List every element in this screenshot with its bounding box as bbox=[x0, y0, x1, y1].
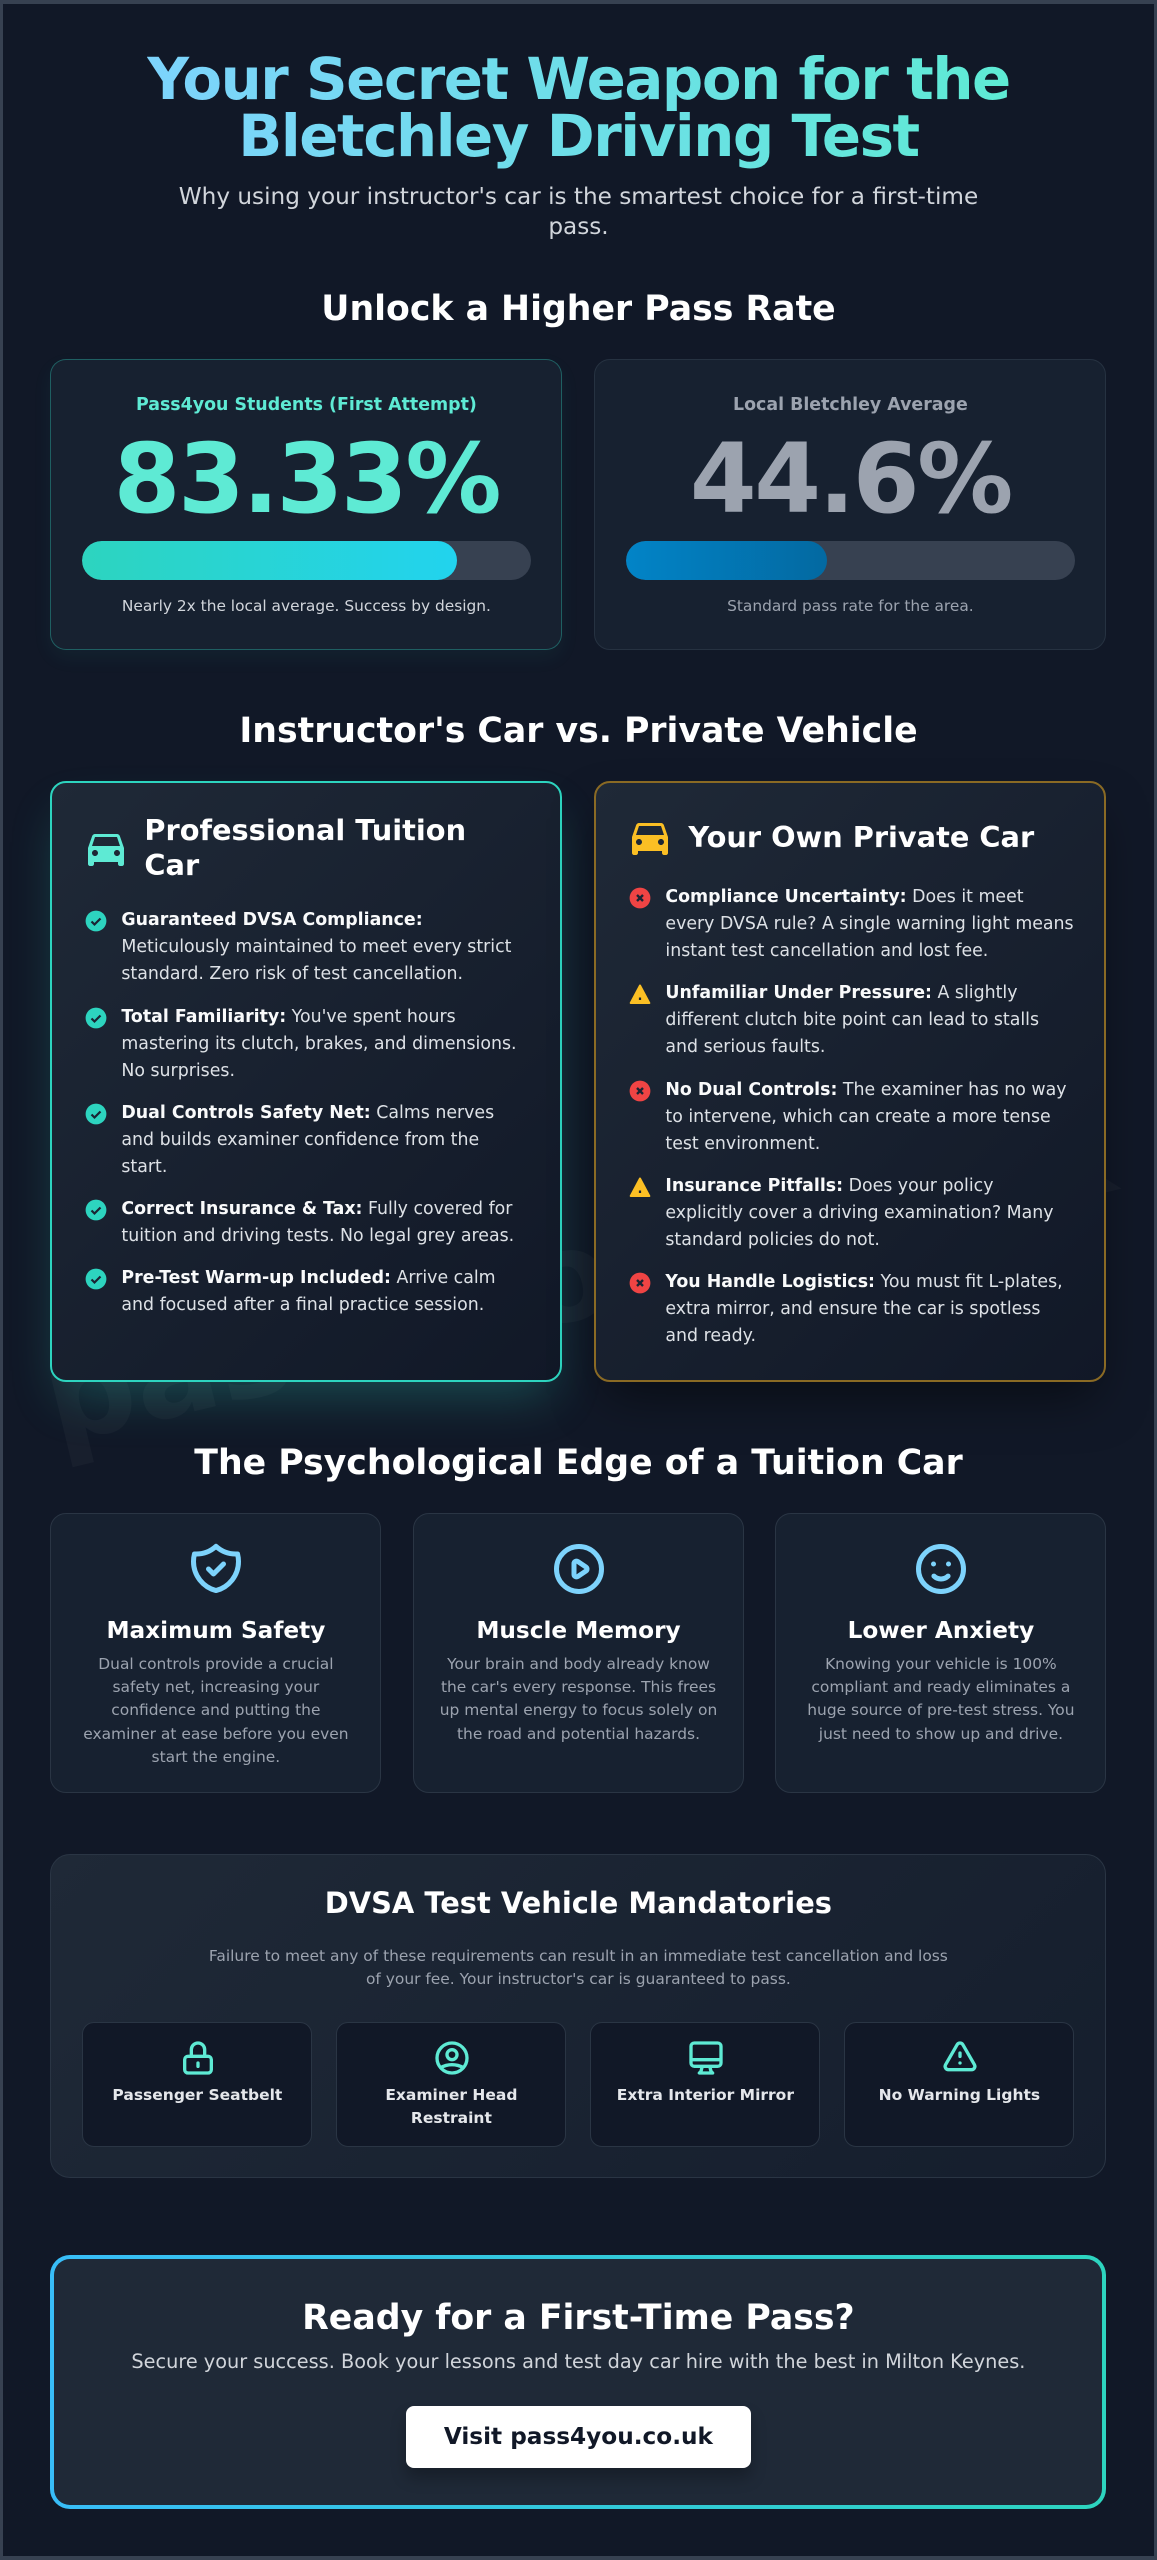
card text: examiner at ease before you even bbox=[83, 1725, 349, 1743]
item: insurance: explicitly cover a driving examination? Many bbox=[665, 1203, 1054, 1223]
card text: just need to show up and drive. bbox=[819, 1725, 1063, 1743]
icon: play bbox=[554, 1544, 604, 1594]
panel: lower anxiety bbox=[775, 1513, 1106, 1793]
panel heading: DVSA Test Vehicle Mandatories bbox=[325, 1886, 832, 1920]
card text bbox=[83, 1655, 349, 1766]
panel: muscle memory bbox=[413, 1513, 744, 1793]
item: compliance: standard. Zero risk of test cancellation. bbox=[121, 964, 463, 984]
item: warm-up: and focused after a final practice session. bbox=[121, 1295, 484, 1315]
panel: dvsa mandatories bbox=[50, 1854, 1106, 2178]
card heading: Muscle Memory bbox=[476, 1617, 681, 1644]
item: warm-up: Pre-Test Warm-up Included: Arrive calm bbox=[121, 1268, 496, 1288]
item: dual controls: Dual Controls Safety Net: Calms nerves bbox=[121, 1103, 494, 1123]
label: Extra Interior Mirror bbox=[617, 2086, 794, 2104]
item: logistics: extra mirror, and ensure the car is spotless bbox=[665, 1299, 1040, 1319]
panel heading: Car bbox=[144, 848, 199, 882]
item: insurance bbox=[630, 1176, 1054, 1250]
panel text bbox=[209, 1947, 948, 1988]
item: dual controls: test environment. bbox=[665, 1134, 820, 1154]
icon: warning bbox=[943, 2041, 977, 2072]
card text: safety net, increasing your bbox=[113, 1678, 319, 1696]
label bbox=[385, 2086, 517, 2127]
card text: Your brain and body already know bbox=[447, 1655, 710, 1673]
label: Restraint bbox=[411, 2109, 492, 2127]
item: logistics: and ready. bbox=[665, 1326, 756, 1346]
panel heading: Professional Tuition bbox=[144, 813, 466, 847]
item: logistics bbox=[630, 1272, 1063, 1346]
stat value: 44.6% bbox=[690, 423, 1011, 535]
icon: car bbox=[88, 834, 124, 866]
stat label: Pass4you Students (First Attempt) bbox=[136, 395, 477, 415]
item: insurance bbox=[86, 1199, 514, 1246]
icon: car bbox=[632, 823, 668, 855]
item: dual controls bbox=[86, 1103, 494, 1177]
cta button: Visit pass4you.co.uk bbox=[444, 2423, 713, 2450]
progress bar bbox=[82, 541, 531, 580]
requirement: head restraint bbox=[336, 2022, 566, 2147]
heading: comparison: Instructor's Car vs. Private Vehicle bbox=[239, 711, 918, 751]
item: unfamiliar: Unfamiliar Under Pressure: A slightly bbox=[665, 983, 1018, 1003]
item: dual controls: to intervene, which can create a more tense bbox=[665, 1106, 1051, 1126]
item: compliance: every DVSA rule? A single warning light means bbox=[665, 914, 1074, 934]
stat value: 83.33% bbox=[114, 423, 499, 535]
item: compliance: Guaranteed DVSA Compliance: bbox=[121, 910, 423, 930]
icon: smile bbox=[916, 1544, 966, 1594]
icon: monitor bbox=[689, 2041, 723, 2075]
panel heading: Your Own Private Car bbox=[688, 820, 1034, 854]
item: compliance: instant test cancellation and lost fee. bbox=[665, 941, 988, 961]
icon: shield bbox=[191, 1544, 241, 1593]
card text bbox=[807, 1655, 1075, 1743]
icon: lock bbox=[183, 2041, 213, 2075]
panel: local average stat bbox=[594, 359, 1106, 650]
cta heading: Ready for a First-Time Pass? bbox=[302, 2298, 855, 2338]
cta button bbox=[406, 2406, 751, 2468]
card text: the car's every response. This frees bbox=[441, 1678, 716, 1696]
item: familiarity: Total Familiarity: You've spent hours bbox=[121, 1006, 456, 1026]
card text: compliant and ready eliminates a bbox=[811, 1678, 1070, 1696]
requirement: warning lights bbox=[844, 2022, 1074, 2147]
label: No Warning Lights bbox=[879, 2086, 1040, 2104]
panel heading bbox=[144, 813, 466, 882]
heading: pass rate: Unlock a Higher Pass Rate bbox=[321, 289, 836, 329]
item: dual controls: start. bbox=[121, 1157, 167, 1177]
card heading: Maximum Safety bbox=[106, 1617, 325, 1644]
stat note: Nearly 2x the local average. Success by design. bbox=[122, 597, 491, 615]
item: dual controls: No Dual Controls: The examiner has no way bbox=[665, 1080, 1067, 1100]
card text bbox=[440, 1655, 717, 1743]
card text: huge source of pre-test stress. You bbox=[807, 1701, 1075, 1719]
title: Your Secret Weapon for the bbox=[147, 45, 1010, 113]
item: insurance: standard policies do not. bbox=[665, 1230, 880, 1250]
panel text: Failure to meet any of these requirements can result in an immediate test cancellation and loss bbox=[209, 1947, 948, 1965]
item: familiarity: mastering its clutch, brakes, and dimensions. bbox=[121, 1034, 517, 1054]
title: Bletchley Driving Test bbox=[238, 102, 919, 170]
item: insurance: Insurance Pitfalls: Does your policy bbox=[665, 1176, 993, 1196]
label: Passenger Seatbelt bbox=[112, 2086, 282, 2104]
subtitle bbox=[179, 184, 978, 240]
card text: Knowing your vehicle is 100% bbox=[825, 1655, 1057, 1673]
label: Examiner Head bbox=[385, 2086, 517, 2104]
panel: professional tuition car bbox=[50, 781, 562, 1382]
cta text: Secure your success. Book your lessons and test day car hire with the best in Milton Keynes. bbox=[131, 2350, 1025, 2373]
item: dual controls bbox=[630, 1080, 1067, 1154]
item: logistics: You Handle Logistics: You must fit L-plates, bbox=[665, 1272, 1063, 1292]
item: familiarity: No surprises. bbox=[121, 1060, 235, 1080]
icon: user bbox=[435, 2041, 469, 2075]
card text: the road and potential hazards. bbox=[457, 1725, 700, 1743]
stat note: Standard pass rate for the area. bbox=[727, 597, 974, 615]
item: compliance: Compliance Uncertainty: Does it meet bbox=[665, 887, 1024, 907]
card text: Dual controls provide a crucial bbox=[98, 1655, 333, 1673]
panel: call to action bbox=[50, 2255, 1106, 2509]
item: unfamiliar: and serious faults. bbox=[665, 1037, 825, 1057]
title bbox=[147, 45, 1010, 170]
card text: up mental energy to focus solely on bbox=[440, 1701, 717, 1719]
heading: psychological edge: The Psychological Edge of a Tuition Car bbox=[194, 1443, 963, 1483]
item: insurance: tuition and driving tests. No legal grey areas. bbox=[121, 1226, 514, 1246]
requirement: seatbelt bbox=[82, 2022, 312, 2147]
item: familiarity bbox=[86, 1006, 517, 1080]
subtitle: Why using your instructor's car is the smartest choice for a first-time bbox=[179, 184, 978, 210]
card heading: Lower Anxiety bbox=[848, 1617, 1034, 1644]
stat label: Local Bletchley Average bbox=[733, 395, 968, 415]
item: compliance bbox=[630, 887, 1074, 961]
item: dual controls: and builds examiner confidence from the bbox=[121, 1130, 479, 1150]
item: insurance: Correct Insurance & Tax: Fully covered for bbox=[121, 1199, 512, 1219]
item: compliance bbox=[86, 910, 512, 984]
item: warm-up bbox=[86, 1268, 496, 1315]
subtitle: pass. bbox=[548, 214, 609, 240]
panel: maximum safety bbox=[50, 1513, 381, 1793]
panel text: of your fee. Your instructor's car is guaranteed to pass. bbox=[366, 1970, 791, 1988]
panel: pass4you stat bbox=[50, 359, 562, 650]
progress bar bbox=[626, 541, 1075, 580]
card text: confidence and putting the bbox=[111, 1701, 320, 1719]
card text: start the engine. bbox=[152, 1748, 280, 1766]
panel: private car bbox=[594, 781, 1106, 1382]
item: unfamiliar: different clutch bite point can lead to stalls bbox=[665, 1010, 1039, 1030]
item: unfamiliar bbox=[630, 983, 1039, 1057]
item: compliance: Meticulously maintained to meet every strict bbox=[121, 937, 511, 957]
requirement: mirror bbox=[590, 2022, 820, 2147]
watermark: pass4you.co.uk bbox=[30, 1077, 1126, 1474]
